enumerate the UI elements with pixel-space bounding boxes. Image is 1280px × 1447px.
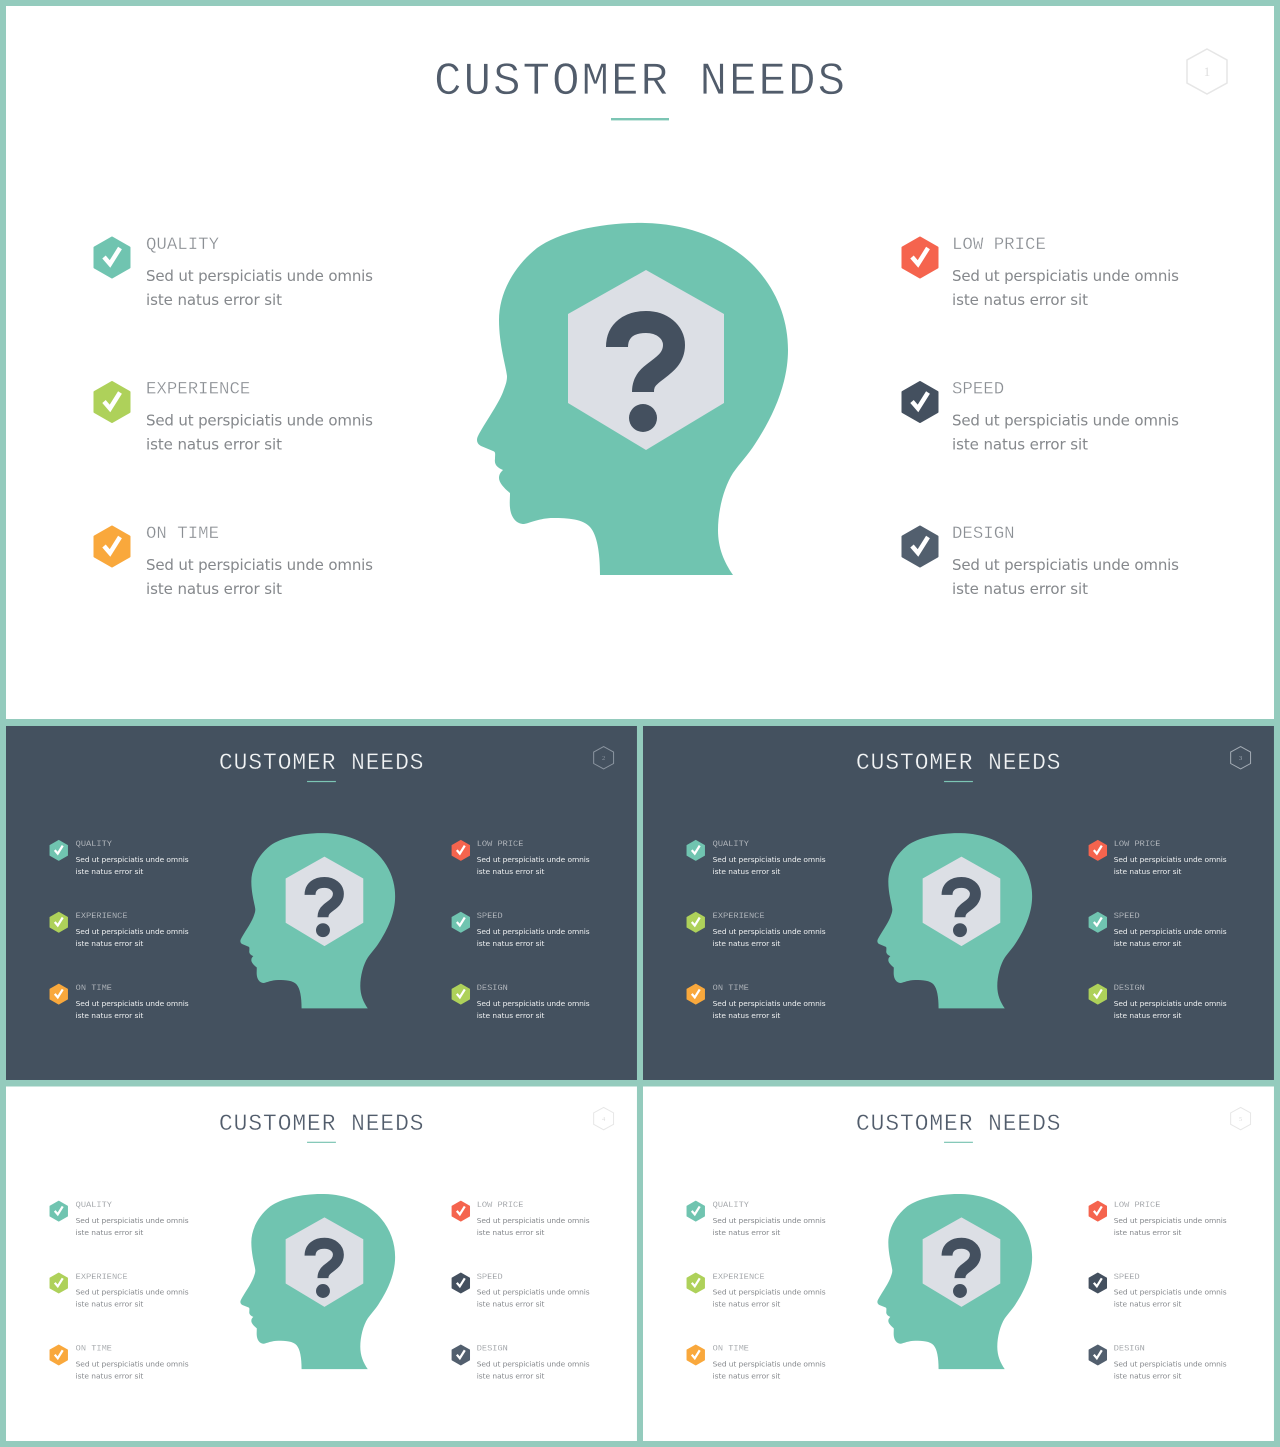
title underline <box>611 118 669 120</box>
item: on time: iste natus error sit <box>713 1011 780 1020</box>
item: quality: iste natus error sit <box>76 1228 143 1237</box>
item: experience: EXPERIENCE <box>146 380 250 400</box>
item: design: iste natus error sit <box>952 580 1088 598</box>
title underline <box>307 1142 336 1143</box>
item: quality: QUALITY <box>76 1200 113 1210</box>
item: experience: Sed ut perspiciatis unde omnis <box>146 412 373 430</box>
item: experience: Sed ut perspiciatis unde omnis <box>76 927 189 936</box>
page number badge: 4 <box>602 1116 606 1123</box>
item: quality: QUALITY <box>713 839 750 849</box>
item: quality: QUALITY <box>146 236 220 255</box>
item: low price: iste natus error sit <box>477 1228 544 1237</box>
page number badge: 5 <box>1239 1116 1242 1123</box>
item: design: iste natus error sit <box>477 1372 544 1381</box>
item: speed: iste natus error sit <box>477 939 544 948</box>
item: speed <box>452 1272 590 1309</box>
item: on time <box>687 983 826 1020</box>
item: design: iste natus error sit <box>477 1011 544 1020</box>
item: speed <box>1089 1272 1227 1309</box>
item: design: DESIGN <box>952 525 1015 544</box>
item: quality: iste natus error sit <box>713 1228 780 1237</box>
item: quality: Sed ut perspiciatis unde omnis <box>146 267 373 285</box>
item: on time <box>94 525 373 598</box>
item: speed: SPEED <box>477 1272 503 1282</box>
item: design: DESIGN <box>477 1344 508 1354</box>
page number badge: 2 <box>602 755 605 762</box>
item: quality: iste natus error sit <box>146 291 282 309</box>
item: low price: LOW PRICE <box>1114 1200 1160 1210</box>
item: design: Sed ut perspiciatis unde omnis <box>477 1360 590 1369</box>
item: on time: iste natus error sit <box>76 1372 143 1381</box>
item: design: DESIGN <box>1114 983 1145 993</box>
item: speed: iste natus error sit <box>952 436 1088 454</box>
title underline <box>307 781 336 782</box>
item: speed <box>452 911 590 948</box>
item: quality <box>687 839 826 876</box>
item: experience: iste natus error sit <box>146 436 282 454</box>
head illustration <box>477 223 788 575</box>
item: on time: iste natus error sit <box>713 1372 780 1381</box>
page number badge <box>594 747 614 769</box>
page number badge <box>1231 1107 1251 1130</box>
item: low price <box>902 236 1179 309</box>
item: speed: Sed ut perspiciatis unde omnis <box>1114 1288 1227 1297</box>
item: on time <box>687 1344 826 1381</box>
item: on time: ON TIME <box>713 1344 749 1354</box>
panel: main light slide <box>6 6 1274 719</box>
title: CUSTOMER NEEDS <box>219 750 424 776</box>
title underline <box>944 781 973 782</box>
item: speed: SPEED <box>477 911 503 921</box>
item: design: DESIGN <box>477 983 508 993</box>
head illustration <box>240 833 395 1008</box>
item: experience: EXPERIENCE <box>713 911 765 921</box>
item: quality <box>94 236 373 309</box>
item: speed: Sed ut perspiciatis unde omnis <box>1114 927 1227 936</box>
item: speed: SPEED <box>1114 1272 1140 1282</box>
item: speed <box>902 380 1179 454</box>
item: quality: Sed ut perspiciatis unde omnis <box>76 855 189 864</box>
item: on time: Sed ut perspiciatis unde omnis <box>76 999 189 1008</box>
item: design: iste natus error sit <box>1114 1372 1181 1381</box>
item: design <box>902 525 1179 598</box>
item: design <box>452 1344 590 1381</box>
item: design: Sed ut perspiciatis unde omnis <box>952 556 1179 574</box>
item: design: iste natus error sit <box>1114 1011 1181 1020</box>
panel: light slide 4 <box>6 1086 637 1441</box>
item: quality: QUALITY <box>713 1200 750 1210</box>
item: design: DESIGN <box>1114 1344 1145 1354</box>
item: experience: EXPERIENCE <box>76 911 128 921</box>
item: quality <box>687 1200 826 1237</box>
item: experience: iste natus error sit <box>713 1300 780 1309</box>
item: low price <box>1089 1200 1227 1237</box>
item: experience: Sed ut perspiciatis unde omnis <box>713 1288 826 1297</box>
item: speed: Sed ut perspiciatis unde omnis <box>952 412 1179 430</box>
item: speed: Sed ut perspiciatis unde omnis <box>477 1288 590 1297</box>
page number badge <box>1231 747 1251 769</box>
item: low price: LOW PRICE <box>477 839 523 849</box>
item: low price: iste natus error sit <box>477 867 544 876</box>
item: low price <box>1089 839 1227 876</box>
item: experience: Sed ut perspiciatis unde omnis <box>713 927 826 936</box>
item: quality: Sed ut perspiciatis unde omnis <box>76 1216 189 1225</box>
item: low price: Sed ut perspiciatis unde omnis <box>477 1216 590 1225</box>
item: low price: LOW PRICE <box>952 236 1046 255</box>
item: quality: iste natus error sit <box>713 867 780 876</box>
item: low price: iste natus error sit <box>1114 1228 1181 1237</box>
item: design: Sed ut perspiciatis unde omnis <box>477 999 590 1008</box>
item: experience: iste natus error sit <box>76 939 143 948</box>
page number badge: 3 <box>1239 755 1242 762</box>
item: quality: Sed ut perspiciatis unde omnis <box>713 1216 826 1225</box>
item: experience: EXPERIENCE <box>713 1272 765 1282</box>
item: design: Sed ut perspiciatis unde omnis <box>1114 999 1227 1008</box>
item: on time: iste natus error sit <box>146 580 282 598</box>
item: low price: iste natus error sit <box>952 291 1088 309</box>
item: speed: SPEED <box>952 380 1004 400</box>
item: on time: Sed ut perspiciatis unde omnis <box>146 556 373 574</box>
item: design <box>452 983 590 1020</box>
item: on time: ON TIME <box>713 983 749 993</box>
item: speed <box>1089 911 1227 948</box>
item: on time <box>50 1344 189 1381</box>
item: speed: Sed ut perspiciatis unde omnis <box>477 927 590 936</box>
item: on time: Sed ut perspiciatis unde omnis <box>76 1360 189 1369</box>
item: low price <box>452 839 590 876</box>
item: quality <box>50 839 189 876</box>
item: quality: iste natus error sit <box>76 867 143 876</box>
head illustration <box>877 1194 1032 1369</box>
item: low price: Sed ut perspiciatis unde omnis <box>1114 1216 1227 1225</box>
item: design <box>1089 1344 1227 1381</box>
item: on time: iste natus error sit <box>76 1011 143 1020</box>
item: on time: Sed ut perspiciatis unde omnis <box>713 999 826 1008</box>
item: design <box>1089 983 1227 1020</box>
title: CUSTOMER NEEDS <box>856 750 1061 776</box>
page number badge: 1 <box>1204 64 1210 79</box>
item: experience: Sed ut perspiciatis unde omnis <box>76 1288 189 1297</box>
head illustration <box>877 833 1032 1008</box>
item: low price <box>452 1200 590 1237</box>
item: experience <box>94 380 373 454</box>
item: low price: Sed ut perspiciatis unde omnis <box>1114 855 1227 864</box>
item: design: Sed ut perspiciatis unde omnis <box>1114 1360 1227 1369</box>
item: speed: iste natus error sit <box>477 1300 544 1309</box>
item: low price: Sed ut perspiciatis unde omnis <box>477 855 590 864</box>
item: on time: ON TIME <box>76 983 112 993</box>
item: speed: SPEED <box>1114 911 1140 921</box>
title: CUSTOMER NEEDS <box>219 1111 424 1137</box>
item: experience: EXPERIENCE <box>76 1272 128 1282</box>
panel: light slide 5 <box>643 1086 1274 1441</box>
panel: dark slide 3 <box>643 726 1274 1080</box>
item: quality: QUALITY <box>76 839 113 849</box>
item: low price: iste natus error sit <box>1114 867 1181 876</box>
title: CUSTOMER NEEDS <box>434 56 847 108</box>
item: on time: ON TIME <box>146 525 219 544</box>
head illustration <box>240 1194 395 1369</box>
item: low price: LOW PRICE <box>477 1200 523 1210</box>
item: quality: Sed ut perspiciatis unde omnis <box>713 855 826 864</box>
item: low price: Sed ut perspiciatis unde omnis <box>952 267 1179 285</box>
title underline <box>944 1142 973 1143</box>
item: experience: iste natus error sit <box>713 939 780 948</box>
item: experience <box>687 911 826 948</box>
item: on time: Sed ut perspiciatis unde omnis <box>713 1360 826 1369</box>
item: quality <box>50 1200 189 1237</box>
item: on time <box>50 983 189 1020</box>
item: speed: iste natus error sit <box>1114 1300 1181 1309</box>
item: experience <box>50 1272 189 1309</box>
item: experience <box>50 911 189 948</box>
title: CUSTOMER NEEDS <box>856 1111 1061 1137</box>
page number badge <box>594 1107 614 1130</box>
item: experience <box>687 1272 826 1309</box>
item: low price: LOW PRICE <box>1114 839 1160 849</box>
item: speed: iste natus error sit <box>1114 939 1181 948</box>
item: on time: ON TIME <box>76 1344 112 1354</box>
page number badge <box>1187 49 1227 94</box>
item: experience: iste natus error sit <box>76 1300 143 1309</box>
panel: dark slide 2 <box>6 726 637 1080</box>
